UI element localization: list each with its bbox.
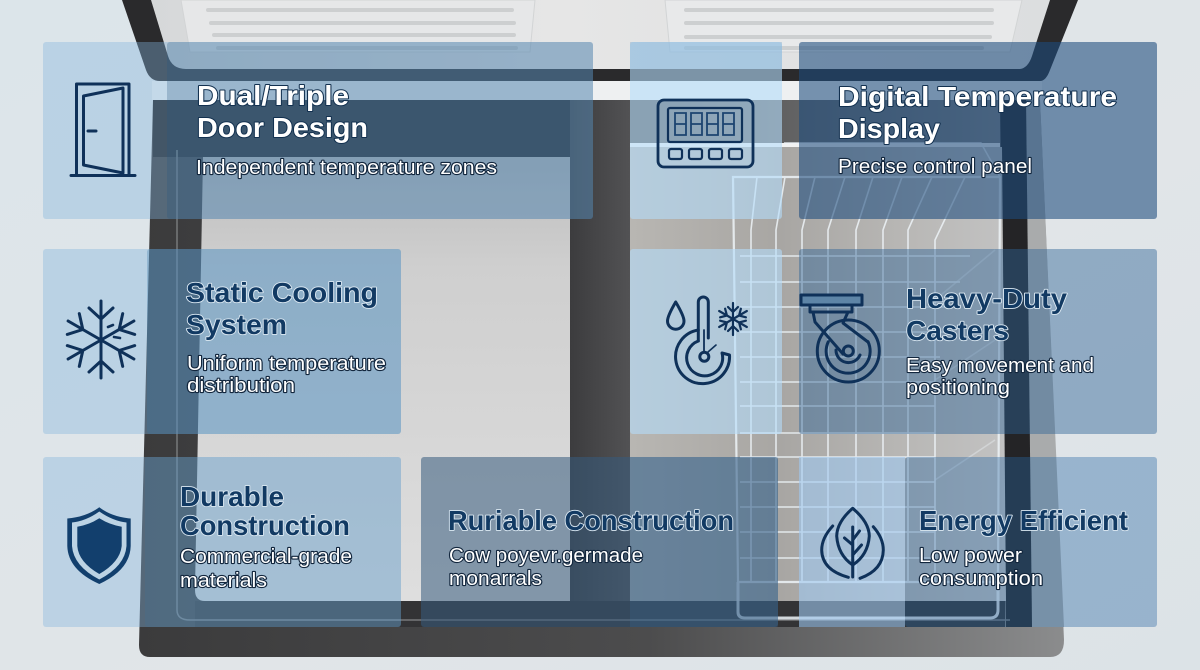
right compartment: [630, 147, 1006, 601]
center mullion: [570, 100, 630, 627]
text: uniform temperature distribution: Uniform temperature: [187, 353, 386, 375]
icon: door: [71, 84, 135, 176]
text: precise control panel: Precise control panel: [838, 156, 1032, 178]
heading: heavy-duty casters: Heavy-Duty: [906, 283, 1067, 314]
text: easy movement and positioning: Easy movement and: [906, 355, 1094, 377]
icon: leaf: [822, 508, 883, 578]
heading: static cooling system: [186, 277, 378, 340]
left compartment: [195, 157, 570, 601]
panel: digital temperature display: [799, 42, 1157, 219]
lid: [122, 0, 1078, 81]
right side wall: [1026, 100, 1064, 627]
heading: heavy-duty casters: [906, 283, 1067, 346]
panel: ruriable construction: [421, 457, 778, 627]
text: cow poyevr.germade monarrals: Cow poyevr.germade: [449, 545, 643, 567]
panel: thermostat column middle: [630, 249, 782, 434]
heading: digital temperature display: Digital Temperature: [838, 81, 1117, 112]
text: commercial-grade materials: materials: [180, 570, 267, 592]
heading: static cooling system: System: [186, 309, 287, 340]
text: commercial-grade materials: [180, 546, 352, 592]
text: low power consumption: consumption: [919, 568, 1043, 590]
heading: static cooling system: Static Cooling: [186, 277, 378, 308]
wire basket: [733, 143, 1000, 618]
heading: durable construction: [180, 481, 350, 541]
cabinet body: [139, 100, 1064, 657]
top frame band: [153, 100, 570, 157]
heading: dual/triple door design: Door Design: [197, 112, 368, 143]
panel: heavy-duty casters: [799, 249, 1157, 434]
icon: snowflake: [62, 301, 140, 378]
heading: dual/triple door design: Dual/Triple: [197, 80, 349, 111]
heading: digital temperature display: Display: [838, 113, 940, 144]
text: easy movement and positioning: positioning: [906, 377, 1010, 399]
heading: dual/triple door design: [197, 80, 368, 143]
heading: energy efficient: Energy Efficient: [919, 505, 1128, 536]
text: uniform temperature distribution: distribution: [187, 375, 295, 397]
panel: static cooling system: [43, 249, 401, 434]
text: cow poyevr.germade monarrals: monarrals: [449, 568, 542, 590]
white rim strip: [152, 81, 1042, 100]
text: low power consumption: Low power: [919, 545, 1022, 567]
panel: durable construction: [43, 457, 401, 627]
icon: shield: [67, 507, 131, 584]
text: commercial-grade materials: Commercial-grade: [180, 546, 352, 568]
text: easy movement and positioning: [906, 355, 1094, 399]
icon: thermostat with drop and snowflake: [668, 297, 749, 384]
heading: digital temperature display: [838, 81, 1117, 144]
panel: dual/triple door design: [43, 42, 593, 219]
icon: digital display: [658, 100, 753, 167]
text: cow poyevr.germade monarrals: [449, 545, 643, 590]
text: low power consumption: [919, 545, 1043, 590]
panel: energy efficient: [799, 457, 1157, 627]
heading: durable construction: Construction: [180, 510, 350, 541]
heading: durable construction: Durable: [180, 481, 284, 512]
heading: heavy-duty casters: Casters: [906, 315, 1009, 346]
icon: caster wheel: [801, 295, 879, 382]
text: independent temperature zones: Independent temperature zones: [196, 157, 497, 179]
panel: thermostat column top: [630, 42, 782, 219]
heading: ruriable construction: Ruriable Construction: [448, 505, 734, 536]
freezer illustration: [122, 0, 1078, 657]
text: uniform temperature distribution: [187, 353, 386, 397]
